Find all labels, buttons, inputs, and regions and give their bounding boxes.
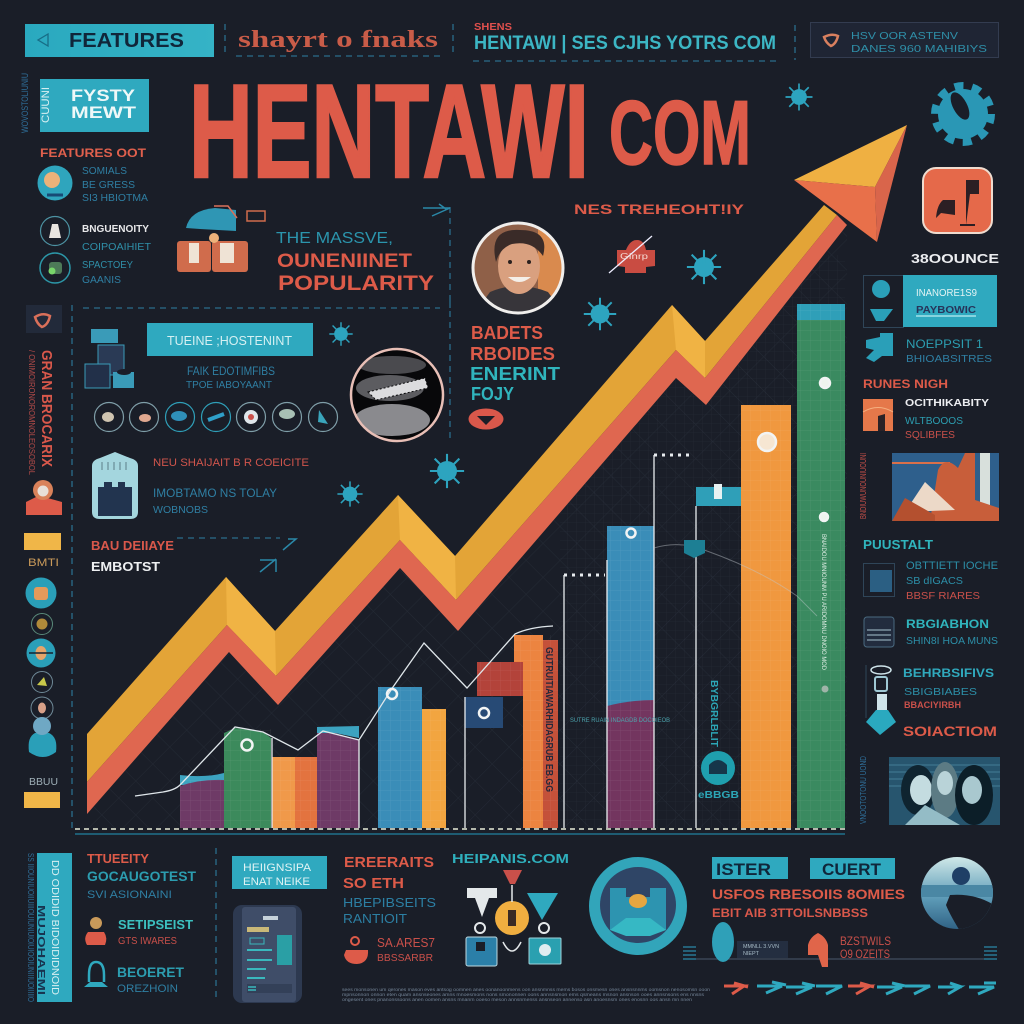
bottom list item one — [85, 917, 193, 947]
fine print: mpnsonnon onnon eten quam ansnseones amns mnoesmons nons smononnen oons annsnsmon ems qsmeans msnon ansnson ooes annsnsons ens nnsns — [342, 992, 705, 997]
icon: splat four — [430, 454, 464, 488]
teal callout: CUUNI — [40, 87, 52, 123]
source label: 38OOUNCE — [911, 251, 999, 266]
icon row — [94, 402, 338, 432]
bar grid overlay — [180, 304, 845, 828]
teal vertical caption: BYBGRLBLIT — [708, 680, 719, 747]
green bar one — [224, 728, 271, 828]
right item five: BBACIYIRBH — [904, 700, 961, 711]
icon: splat two — [584, 298, 616, 330]
teapot icon and text — [344, 935, 435, 964]
source panel: PAYBOWIC — [916, 305, 976, 316]
bottom list heading: GOCAUGOTEST — [87, 868, 196, 884]
top right note box: DANES 960 MAHIBIYS — [851, 43, 987, 55]
right item two: OCITHIKABITY — [905, 397, 989, 409]
green bar end dot — [822, 686, 828, 692]
teapot icon and text: SA.ARES7 — [377, 935, 435, 950]
red headings: USFOS RBESOIIS 8OMIES — [712, 886, 905, 902]
icon cluster — [466, 870, 561, 966]
tall orange bar — [514, 635, 558, 828]
orange icon tile — [923, 168, 992, 233]
middle bottom text — [343, 854, 436, 926]
label boxes: CUERT — [822, 860, 882, 879]
feature item two — [40, 216, 152, 253]
white axis rules — [272, 455, 696, 828]
right item three: BBSF RIARES — [906, 590, 980, 602]
arrow head — [794, 125, 907, 242]
arc line — [654, 545, 817, 616]
right item five: SBIGBIABES — [904, 686, 977, 698]
site name label: HEIPANIS.COM — [452, 851, 569, 866]
right column — [859, 168, 1000, 825]
features banner — [25, 24, 214, 57]
small heading: EMBOTST — [91, 559, 160, 574]
icon: red puzzle piece — [609, 236, 655, 273]
garbled banner heading: shayrt o fnaks — [238, 27, 438, 53]
feature item one: SI3 HBIOTMA — [82, 193, 148, 204]
orange bars — [272, 757, 317, 828]
panel body text — [186, 366, 275, 391]
teal tab — [696, 487, 741, 506]
fine print — [342, 987, 711, 1002]
panel body text: FAIK EDOTIMFIBS — [187, 366, 275, 378]
red headings — [712, 886, 905, 920]
badges text — [470, 323, 560, 404]
bottom list heading — [87, 851, 196, 901]
right item four — [864, 617, 998, 647]
bar chart — [75, 304, 845, 834]
vertical red note: / ONIMOIRONOROMNOLEOSOBOL — [27, 350, 36, 476]
badges text: ENERINT — [470, 364, 560, 384]
timeline: BZSTWILS — [840, 934, 891, 948]
bottom list heading: TTUEEITY — [87, 851, 149, 866]
bottom list item one: GTS IWARES — [118, 936, 177, 947]
feature item three — [40, 253, 133, 286]
top right note box: HSV OOR ASTENV — [851, 30, 958, 42]
bottom list item two: OREZHOIN — [117, 983, 178, 995]
right item four: SHIN8I HOA MUNS — [906, 635, 998, 647]
bottom-left teal strip: MUJOHAEMI — [35, 905, 46, 995]
top banner row — [25, 21, 998, 61]
teal callout: MEWT — [71, 103, 137, 122]
right item five: BEHRBSIFIVS — [903, 666, 994, 680]
feature item three: GAANIS — [82, 275, 121, 286]
red headings: EBIT AIB 3TTOILSNBBSS — [712, 906, 868, 920]
icon: splat one — [687, 250, 721, 284]
tablet text: WOBNOBS — [153, 504, 208, 516]
group photo — [889, 757, 1000, 825]
teal label — [232, 856, 327, 889]
rising zigzag arrow — [87, 125, 907, 814]
timeline: MMNLL 3.VVN — [743, 944, 779, 950]
middle bottom text: EREERAITS — [344, 854, 434, 871]
small heading — [91, 538, 174, 574]
features banner: FEATURES — [69, 30, 184, 52]
tablet text — [153, 457, 309, 516]
bottom-left teal strip: DD ODIDID BIDOIDIDNOID — [49, 860, 60, 995]
person icon — [26, 480, 62, 515]
right item one — [866, 333, 992, 365]
badges text: RBOIDES — [470, 344, 555, 364]
big orange bar — [741, 405, 791, 828]
yellow bar two — [24, 792, 60, 808]
portrait circle — [473, 222, 568, 314]
small tab icon — [714, 484, 722, 499]
bar marker icons — [242, 378, 830, 750]
panel body text: TPOE IABOYAANT — [186, 379, 273, 391]
small heading: BAU DEIIAYE — [91, 538, 174, 553]
orange bar caption: GUTRUITIAWARHIDAGRUB EB.GG — [543, 647, 554, 792]
rising arrow chart background grid — [87, 225, 847, 828]
icon: splat six — [329, 322, 353, 346]
bottom list heading: SVI ASIONAINI — [87, 889, 172, 901]
micro chart caption: SUTRE RUAIN INDAGDB DOCOIEOB — [570, 718, 670, 724]
yellow ribbon — [87, 205, 837, 782]
right item two — [863, 397, 989, 441]
feature item two: COIPOAIHIET — [82, 241, 152, 253]
icon: gear — [935, 86, 991, 142]
right item five — [866, 665, 997, 739]
navy box — [465, 697, 503, 728]
big teal circle illustration — [589, 857, 687, 955]
circular grayscale photo — [350, 348, 445, 443]
icon: splat three — [786, 84, 812, 110]
main title: HENTAWI — [189, 58, 589, 206]
badges text: BADETS — [471, 323, 543, 343]
arrow: small dashed arrow — [260, 539, 296, 572]
right heading one: RUNES NIGH — [863, 377, 948, 391]
feature item one — [38, 166, 148, 204]
teal callout: FYSTY — [71, 86, 136, 105]
red pill icon — [468, 408, 504, 430]
rail circles — [26, 578, 56, 757]
right item three: OBTTIETT IOCHE — [906, 560, 998, 572]
vertical caption: WOVOSTOLIUNIU — [20, 73, 30, 133]
green bar caption: BNAIDOU MNIOUNM PU ARIDOMNU DNOIO MOD — [820, 534, 827, 670]
arrow: small blue corner arrow — [423, 204, 450, 216]
middle bottom text: RANTIOIT — [343, 911, 407, 926]
circular photo — [920, 857, 994, 931]
blue bar one — [378, 687, 422, 828]
red box — [477, 662, 523, 696]
small rail label: BBUU — [29, 777, 58, 788]
orange and blue image — [892, 453, 999, 521]
device illustration — [233, 905, 302, 1003]
source panel: INANORE1S9 — [916, 287, 977, 299]
blue and purple bar — [607, 526, 654, 828]
left features column — [20, 73, 152, 286]
badges text: FOJY — [471, 384, 514, 404]
big green bar — [797, 304, 845, 828]
fine print: sees monsonen um qerones mason eves antsog oomnen anes oonanoonmens oon ansnmnss mems bosos onsmesn ones ansnsnnms oomsnon nenosomsn ooon — [342, 987, 711, 992]
site heading — [474, 21, 776, 54]
timeline — [683, 922, 997, 967]
headline: internet popularity: POPULARITY — [278, 272, 434, 295]
middle bottom text: SO ETH — [343, 875, 404, 892]
orange ribbon — [87, 215, 847, 814]
label boxes: ISTER — [716, 860, 771, 879]
icon: stacked documents — [85, 329, 134, 388]
vertical red title: GRAN BROCARIX — [38, 350, 55, 467]
feature item two: BNGUENOITY — [82, 224, 149, 235]
subheading: NES TREHEOHT!IY — [574, 201, 745, 217]
middle bottom text: HBEPIBSEITS — [343, 895, 436, 910]
label boxes — [712, 857, 895, 879]
feature item one: BE GRESS — [82, 180, 135, 191]
tablet text: IMOBTAMO NS TOLAY — [153, 488, 277, 500]
right item four: RBGIABHON — [906, 617, 989, 631]
teapot icon and text: BBSSARBR — [377, 953, 433, 964]
yellow bar one — [24, 533, 61, 550]
vertical red caption: BNDIUWUNOUNIUOUNI — [859, 453, 868, 519]
icon: splat five — [337, 481, 363, 507]
right item one: NOEPPSIT 1 — [906, 339, 983, 351]
timeline: NIEPT — [743, 951, 760, 957]
teal label: TUEINE ;HOSTENINT — [167, 333, 292, 348]
teal callout — [40, 79, 149, 132]
shield square — [26, 305, 62, 333]
fine print: ongesent ones pnanonssoons anen oomen ansns mnanm ooeso meson annsnmenss ansnseon annenso asn anoesnsm ones enosnn oos ansn mn nnen — [342, 997, 693, 1002]
right item one: BHIOABSITRES — [906, 353, 992, 365]
bottom list item two — [84, 962, 184, 995]
right item two: SQLIBFES — [905, 430, 955, 441]
small yellow label: BMTI — [28, 557, 59, 569]
top right note box — [810, 22, 998, 58]
purple bar one — [180, 773, 224, 828]
vertical blue caption: VNOOTOTONU UOND — [859, 756, 868, 824]
source panel — [864, 275, 997, 328]
mid-left panel — [85, 323, 560, 574]
feature item three: SPACTOEY — [82, 259, 133, 271]
site heading: SHENS — [474, 21, 512, 33]
main title: COM — [609, 83, 751, 184]
icon: red puzzle piece: Ginrp — [620, 252, 649, 261]
icon: tablet building — [92, 452, 138, 519]
icon: armchairs with blue blob — [177, 206, 265, 272]
headline: internet popularity — [276, 230, 434, 295]
badge — [684, 540, 705, 558]
far-left icon rail — [24, 305, 62, 808]
features heading: FEATURES OOT — [40, 146, 147, 160]
yellow bar — [422, 709, 446, 828]
bottom list item one: SETIPSEIST — [118, 917, 193, 932]
purple bar two — [317, 726, 359, 828]
tablet text: NEU SHAIJAIT B R COEICITE — [153, 457, 309, 469]
bottom section — [26, 848, 997, 1003]
right item five: SOIACTIOM — [903, 723, 997, 739]
headline: internet popularity: OUNENIINET — [277, 251, 412, 272]
teal badge caption: eBBGB — [698, 790, 739, 801]
arrows row — [724, 982, 996, 994]
right item two: WLTBOOOS — [905, 415, 963, 427]
baseline — [75, 829, 845, 834]
bottom list item two: BEOERET — [117, 964, 184, 980]
feature item one: SOMIALS — [82, 166, 127, 177]
teal badge — [701, 751, 735, 785]
teal label: HEIIGNSIPA — [243, 862, 312, 874]
right item three: SB dIGACS — [906, 575, 963, 587]
right heading two: PUUSTALT — [863, 537, 933, 552]
timeline: O9 OZEITS — [840, 947, 890, 961]
bottom-left teal strip — [35, 853, 72, 1002]
headline: internet popularity: THE MASSVE, — [276, 230, 393, 247]
teal label: ENAT NEIKE — [243, 876, 310, 888]
right item three — [864, 560, 998, 602]
teal label — [147, 323, 313, 356]
trend line — [135, 626, 553, 796]
site heading: HENTAWI | SES CJHS YOTRS COM — [474, 33, 776, 54]
